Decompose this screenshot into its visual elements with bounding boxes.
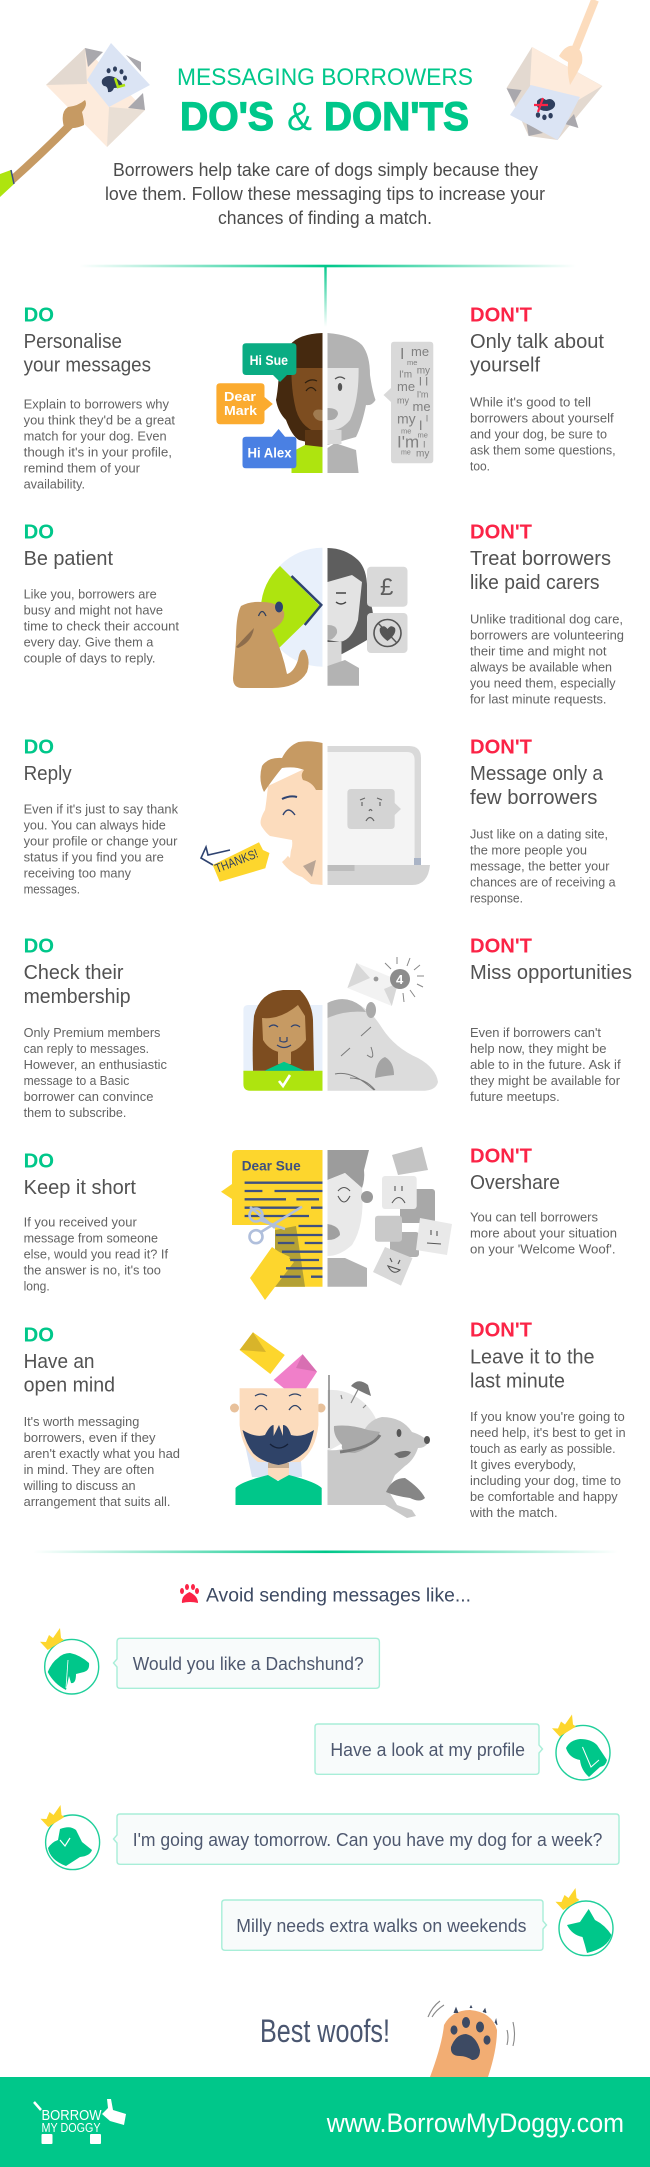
speech bubble: me me me: my [397,395,409,405]
speech bubble: me me me: I [425,375,428,389]
speech bubble: Hi Alex [242,429,296,468]
panel: don't leave it to the last minute: touch as early as possible. [470,1441,616,1456]
panel: don't leave it to the last minute: DON'T [470,1319,532,1341]
panel: don't miss opportunities: they might be available for [470,1073,621,1088]
speech bubble: me me me: I [423,440,426,450]
panel: do check their membership: message to a Basic [24,1073,130,1088]
title: MESSAGING BORROWERS [177,64,473,91]
panel: do check their membership: membership [24,985,131,1008]
panel: don't only talk about yourself: yourself [470,354,540,377]
message: dachshund [40,1628,379,1694]
message: milly [222,1888,613,1956]
panel: don't leave it to the last minute: If you know you're going to [470,1409,625,1424]
footer [0,2077,650,2167]
panel: don't miss opportunities: Miss opportunities [470,961,632,984]
bubble: profile: Have a look at my profile [330,1740,525,1760]
panel: don't leave it to the last minute: need help, it's best to get in [470,1425,626,1440]
bubble: going away [114,1814,619,1864]
panel: do be patient: every day. Give them a [24,634,154,649]
illustration: cut letter and oversharing face: Dear Sue [242,1158,301,1174]
panel: don't leave it to the last minute: last minute [470,1369,565,1392]
panel: do be patient: Like you, borrowers are [24,586,157,601]
speech bubble: me me me: me [411,344,429,359]
panel: do personalise: Personalise [24,330,122,353]
panel: do be patient: busy and might not have [24,602,163,617]
speech bubble: me me me: I [419,417,423,433]
speech bubble: me me me: my [417,365,430,376]
speech bubble: me me me: my [397,410,416,426]
speech bubble: Hi Alex: Hi Alex [248,445,292,461]
intro text [105,160,545,228]
panel: do check their membership: them to subscribe. [24,1105,126,1120]
speech bubble: me me me: me [407,358,417,367]
title: DON'TS [324,95,469,139]
panel: don't message only a few borrowers: message, the better your [470,858,610,873]
panel: don't leave it to the last minute: be comfortable and happy [470,1489,618,1504]
intro text: Borrowers help take care of dogs simply because they [113,160,538,180]
panel: don't only talk about yourself: borrowers about yourself [470,410,614,426]
panel: do reply: you. You can always hide [24,817,166,832]
icon: right envelope with hand [507,0,602,140]
panel: don't treat borrowers like paid carers: their time and might not [470,643,607,658]
sad face bubble [347,789,401,829]
icon: left envelope with hand [0,43,150,197]
panel: do reply [24,736,178,896]
panel: don't overshare [470,1146,617,1257]
speech bubble: Dear Mark: Dear [224,390,256,404]
panel: don't overshare: more about your situation [470,1226,617,1241]
notification envelope: 4 [396,972,404,987]
sign: thanks [201,842,270,882]
intro text: love them. Follow these messaging tips to increase your [105,184,545,204]
bubble: milly [222,1900,547,1950]
speech bubble: me me me: my [416,449,429,460]
panel: don't miss opportunities: Even if borrowers can't [470,1025,601,1040]
speech bubble: me me me: me [401,449,411,456]
panel: do keep it short: message from someone [24,1231,158,1246]
panel: don't overshare: DON'T [470,1146,532,1168]
panel: don't only talk about yourself: Only talk about [470,330,604,353]
panel: do be patient: couple of days to reply. [24,650,155,665]
panel: do have an open mind [23,1324,180,1509]
bubble: going away: I'm going away tomorrow. Can you have my dog for a week? [133,1830,602,1850]
speech bubble: me me me: I'm [399,370,412,381]
panel: don't miss opportunities [470,935,632,1104]
panel: don't treat borrowers like paid carers: you need them, especially [470,675,616,690]
illustration: open-minded man and running dog [230,1332,430,1518]
avatar: dachshund with crown [40,1628,99,1694]
footer url: www.BorrowMyDoggy.com [326,2108,624,2138]
bubble: profile [315,1724,542,1774]
avatar: labrador with crown [552,1714,610,1780]
panel: don't only talk about yourself: While it's good to tell [470,395,591,410]
panel: do have an open mind: willing to discuss an [23,1478,136,1493]
title [177,64,473,139]
illustration: member profile and sleeping dog [243,957,438,1091]
speech bubble: Dear Mark: Mark [224,404,257,418]
panel: do reply: receiving too many [24,865,131,880]
bubble: dachshund: Would you like a Dachshund? [133,1654,364,1674]
intro text: chances of finding a match. [218,208,432,228]
panel: do check their membership: Only Premium members [24,1025,161,1040]
panel: do personalise: match for your dog. Even [24,428,167,444]
panel: do be patient: Be patient [24,547,113,570]
panel: do keep it short [24,1151,168,1294]
panel: do personalise: Explain to borrowers why [24,396,169,412]
panel: do have an open mind: Have an [24,1350,95,1373]
panel: do have an open mind: aren't exactly what you had [24,1446,180,1461]
speech bubble: me me me: me [418,430,428,439]
panel: don't miss opportunities: able to in the future. Ask if [470,1057,621,1072]
panel: don't miss opportunities: help now, they might be [470,1041,606,1056]
panel: do have an open mind: open mind [24,1374,115,1397]
panel: don't treat borrowers like paid carers: Unlike traditional dog care, [470,612,623,627]
logo: MY DOGGY [42,2121,101,2135]
panel: don't leave it to the last minute: with the match. [469,1505,558,1520]
panel: do keep it short: else, would you read it? If [24,1247,168,1262]
speech bubble: me me me: me [397,379,415,394]
panel: do personalise: availability. [24,476,85,492]
bubble: dachshund [114,1638,379,1688]
panel: do have an open mind: borrowers, even if they [24,1430,156,1445]
panel: don't message only a few borrowers: response. [470,890,523,905]
panel: don't message only a few borrowers: chances are of receiving a [470,874,616,889]
card: no heart [367,613,408,653]
panel: don't only talk about yourself [470,304,616,473]
panel: don't miss opportunities: future meetups. [470,1089,560,1104]
message: going away [40,1805,619,1870]
bubble: milly: Milly needs extra walks on weekends [236,1916,527,1936]
panel: don't overshare: Overshare [470,1171,560,1194]
panel: do reply: Reply [24,762,72,785]
panel: don't leave it to the last minute: It gives everybody, [470,1457,576,1472]
panel: do be patient [24,521,179,665]
panel: don't treat borrowers like paid carers: always be available when [470,659,612,674]
panel: don't treat borrowers like paid carers: for last minute requests. [470,691,606,706]
panel: do personalise [24,304,175,492]
panel: don't treat borrowers like paid carers: borrowers are volunteering [470,627,624,642]
speech bubble: me me me: me [401,426,411,435]
panel: don't message only a few borrowers: Message only a [470,762,604,785]
logo [34,2099,126,2144]
speech bubble: Dear Mark [216,383,273,424]
panel: do check their membership: However, an enthusiastic [24,1057,167,1072]
panel: don't treat borrowers like paid carers: like paid carers [470,571,600,594]
card: pound: £ [380,574,393,601]
title: & [287,95,312,139]
panel: don't only talk about yourself: DON'T [470,304,532,326]
speech bubble: me me me [384,342,433,463]
speech bubble: Hi Sue: Hi Sue [250,352,288,368]
illustration: man saying thanks and sad laptop [201,741,430,885]
panel: don't leave it to the last minute: Leave it to the [470,1345,594,1368]
panel: don't miss opportunities: DON'T [470,935,532,957]
illustration: two faces with speech bubbles [216,333,433,473]
panel: do personalise: though it's in your profile, [24,444,172,460]
speech bubble: me me me: me [412,399,431,414]
panel: do check their membership: Check their [24,961,124,984]
notification envelope [347,957,424,1006]
speech bubble: me me me: I'm [397,433,419,452]
panel: do keep it short: DO [24,1151,54,1173]
panel: don't treat borrowers like paid carers: Treat borrowers [470,547,611,570]
avatar: pointy-eared dog with crown [556,1888,613,1956]
panel: do reply: your profile or change your [24,833,178,848]
panel: don't overshare: on your 'Welcome Woof'. [470,1242,616,1257]
title: DO'S [180,95,274,139]
panel: do reply: status if you find you are [24,849,164,864]
panel: do have an open mind: in mind. They are often [24,1462,154,1477]
illustration: dog with clock and woman with cards [233,548,408,688]
panel: do reply: DO [24,736,54,758]
panel: do check their membership [24,935,167,1120]
panel: do have an open mind: It's worth messaging [24,1414,139,1429]
text: best woofs: Best woofs! [260,2013,390,2049]
card: pound [367,567,408,607]
speech bubble: Hi Sue [242,343,296,382]
panel: don't only talk about yourself: and your dog, be sure to [470,426,607,441]
scissors [250,1207,302,1243]
speech bubble: me me me: I [400,346,404,363]
message squares [373,1147,452,1286]
sign: thanks: THANKS! [213,847,260,876]
panel: do reply: Even if it's just to say thank [24,801,178,816]
icon: red paw with cross [180,1584,199,1603]
avatar: dog with collar and crown [40,1805,100,1870]
panel: don't message only a few borrowers [470,736,616,905]
panel: don't leave it to the last minute: including your dog, time to [470,1473,621,1488]
panel: do keep it short: the answer is no, it's too [24,1263,161,1278]
panel: don't leave it to the last minute [469,1319,626,1520]
panel: do have an open mind: arrangement that suits all. [24,1494,170,1509]
panel: do keep it short: long. [24,1279,50,1294]
panel: don't treat borrowers like paid carers: DON'T [470,521,532,543]
illustration: cut letter and oversharing face [221,1147,452,1300]
panel: do reply: messages. [24,881,80,896]
speech bubble: me me me: I [426,414,428,424]
panel: don't message only a few borrowers: few borrowers [470,786,597,809]
panel: don't treat borrowers like paid carers [470,521,624,706]
icon: waving paw [428,2001,514,2077]
heading: avoid sending messages: Avoid sending messages like... [206,1586,471,1607]
speech bubble: me me me: I [419,375,422,389]
panel: don't only talk about yourself: ask them some questions, [470,442,616,457]
panel: do have an open mind: DO [24,1324,54,1346]
speech bubble: me me me: I'm [417,389,428,399]
panel: don't message only a few borrowers: DON'T [470,736,532,758]
panel: do be patient: DO [24,521,54,543]
panel: do keep it short: If you received your [24,1215,137,1230]
panel: don't message only a few borrowers: the more people you [470,842,587,857]
panel: don't message only a few borrowers: Just like on a dating site, [470,826,608,841]
panel: do personalise: your messages [24,354,151,377]
logo: BORROW [42,2108,102,2124]
panel: do check their membership: DO [24,935,54,957]
panel: do check their membership: borrower can convince [24,1089,153,1104]
panel: don't only talk about yourself: too. [470,458,490,473]
panel: do be patient: time to check their account [24,618,179,633]
panel: don't overshare: You can tell borrowers [470,1210,598,1225]
panel: do personalise: remind them of your [24,460,141,476]
panel: do personalise: you think they'd be a great [24,412,175,428]
panel: do personalise: DO [24,304,54,326]
panel: do check their membership: can reply to messages. [24,1041,149,1056]
panel: do keep it short: Keep it short [24,1176,136,1199]
message: profile [315,1714,610,1780]
